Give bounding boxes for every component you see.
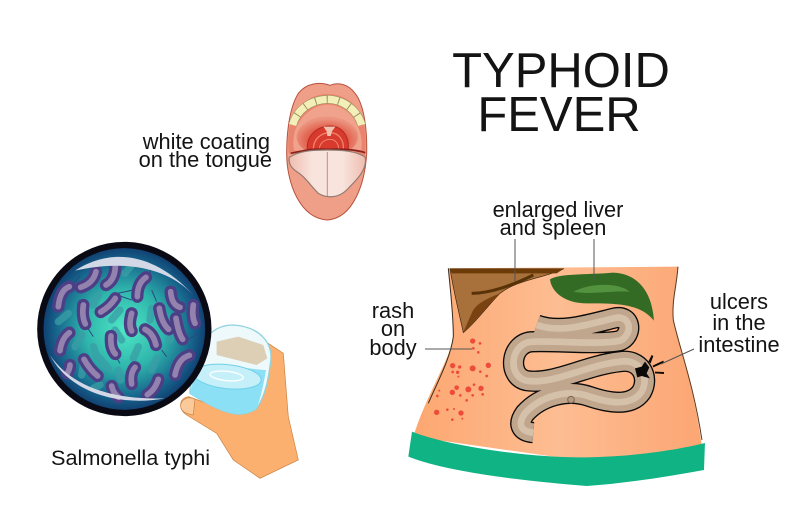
leader lines [425, 239, 694, 364]
title: FEVER [477, 88, 641, 142]
lens highlights [75, 257, 193, 295]
thumb nail [181, 398, 195, 415]
liver [450, 269, 564, 333]
label: ulcers in the intestine [698, 289, 780, 357]
label: enlarged liver and spleen: enlarged liver [493, 197, 623, 222]
label: rash on body [369, 298, 417, 360]
label: rash on body: rash [372, 298, 414, 323]
rash spots [434, 338, 491, 421]
label: ulcers in the intestine: intestine [698, 332, 780, 357]
icon: open mouth with tongue [287, 83, 367, 220]
label: rash on body: on [381, 316, 405, 341]
pale background bacteria [58, 265, 172, 388]
hand [181, 340, 298, 478]
ulcer [635, 355, 664, 378]
label: rash on body: body [369, 335, 417, 360]
label: ulcers in the intestine: ulcers [710, 289, 768, 314]
label: enlarged liver and spleen: and spleen [500, 215, 606, 240]
label: Salmonella typhi: Salmonella typhi [51, 445, 210, 470]
glass of water [190, 325, 271, 414]
waistband [408, 432, 705, 486]
torso skin [413, 267, 702, 463]
flagella [73, 262, 198, 363]
navel [568, 396, 574, 403]
icon: magnifying lens with bacteria [40, 245, 208, 413]
label: white coating on the tongue: white coating [142, 129, 270, 154]
label: white coating on the tongue: on the tongue [139, 147, 272, 172]
title [452, 44, 670, 142]
label: enlarged liver and spleen [493, 197, 623, 240]
label: white coating on the tongue [139, 129, 272, 172]
label: ulcers in the intestine: in the [712, 310, 766, 335]
icon: hand holding glass of water [181, 325, 298, 478]
panel: torso [408, 267, 705, 486]
spleen [550, 273, 654, 321]
intestine [514, 318, 645, 433]
title: TYPHOID [452, 44, 670, 98]
dark bacteria [58, 266, 195, 397]
